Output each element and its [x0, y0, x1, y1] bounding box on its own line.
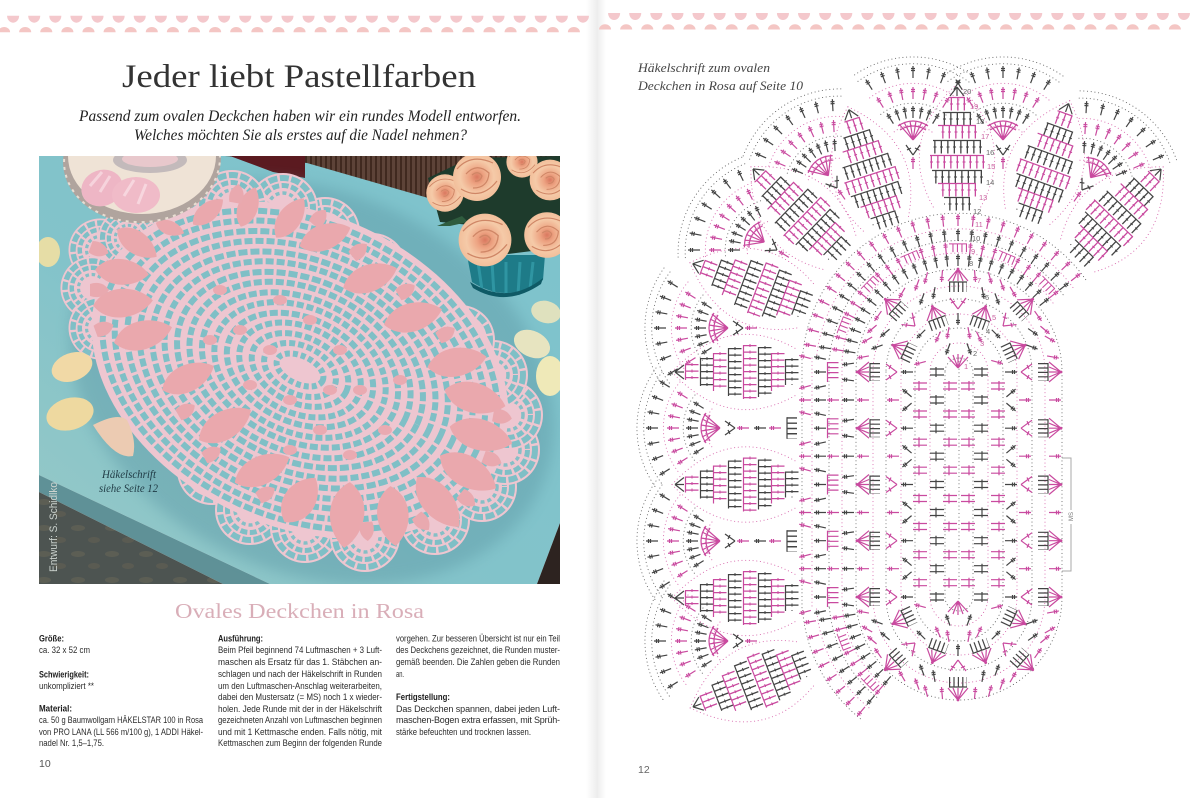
text column 2: instructions: und mit 1 Kettmasche enden. Falls nötig, mit — [218, 727, 382, 737]
text column 1: size, difficulty, material — [39, 634, 203, 748]
photo caption: Häkelschrift — [101, 469, 157, 481]
round numbers: 5 — [992, 313, 996, 322]
doily centre mesh — [92, 202, 508, 538]
top cap of rounds — [857, 268, 1059, 368]
dotted outer rounds bottom left — [803, 607, 886, 720]
round numbers: 12 — [973, 207, 981, 216]
photo: crocheted oval doily on teal table — [39, 156, 560, 584]
table top — [39, 156, 560, 584]
photo credit: Entwurf: S. Schidlko — [48, 482, 60, 572]
plate with meringues — [63, 156, 221, 224]
text column 3: finishing: Das Deckchen spannen, dabei jeden Luft- — [396, 704, 560, 714]
round numbers: 20 — [963, 87, 971, 96]
roses in teal vase — [426, 156, 560, 298]
text column 2: instructions: holen. Jede Runde mit der in der Häkelschrift — [218, 704, 382, 714]
text column 2: instructions: Beim Pfeil beginnend 74 Luftmaschen + 3 Luft- — [218, 645, 382, 655]
page number 10: 10 — [39, 758, 51, 770]
text column 1: size, difficulty, material: Größe: — [39, 634, 64, 644]
text column 3: finishing: stärke befeuchten und trocknen lassen. — [396, 727, 531, 737]
subtitle — [78, 108, 521, 144]
round numbers: 17 — [981, 132, 989, 141]
text column 1: size, difficulty, material: nadel Nr. 1,5–1,75. — [39, 738, 104, 748]
photo caption — [99, 470, 158, 492]
round numbers: 15 — [987, 162, 995, 171]
photo background wood wall — [225, 156, 559, 198]
doily scallops — [60, 170, 543, 572]
MS bracket — [1062, 458, 1075, 571]
round numbers: 4 — [986, 327, 990, 336]
subtitle: Welches möchten Sie als erstes auf die Nadel nehmen? — [134, 127, 467, 144]
chart caption: Deckchen in Rosa auf Seite 10 — [637, 78, 804, 93]
text column 1: size, difficulty, material: Schwierigkeit: — [39, 670, 89, 680]
dotted stadium rounds — [802, 269, 1062, 700]
leaf motifs — [672, 84, 1190, 743]
text column 3: finishing: Fertigstellung: — [396, 692, 450, 702]
round numbers: 1 — [964, 362, 968, 371]
title: Jeder liebt Pastellfarben — [122, 59, 476, 95]
fan blocks — [637, 57, 1187, 701]
doily centre small motifs — [203, 285, 407, 460]
dotted outer rounds top — [803, 213, 1086, 360]
red cloth — [230, 156, 305, 178]
round numbers: 7 — [977, 276, 981, 285]
round numbers: 13 — [979, 193, 987, 202]
text column 1: size, difficulty, material: unkompliziert ** — [39, 681, 94, 691]
round numbers: 6 — [985, 293, 989, 302]
round numbers: 8 — [969, 259, 973, 268]
photo caption: siehe Seite 12 — [99, 483, 158, 495]
text column 3: finishing: vorgehen. Zur besseren Übersicht ist nur ein Teil — [396, 634, 560, 644]
decorative dot border: left page — [0, 16, 589, 32]
text column 2: instructions: schlagen und nach der Häkelschrift in Runden — [218, 669, 382, 679]
round numbers: 11 — [975, 220, 983, 229]
pattern heading: Ovales Deckchen in Rosa — [175, 599, 425, 623]
doily solid leaf motifs — [92, 184, 516, 549]
chart caption — [637, 60, 804, 93]
round numbers: 2 — [973, 349, 977, 358]
round numbers — [963, 87, 996, 371]
rug below table — [39, 492, 223, 584]
rose petals on table — [36, 237, 564, 456]
crochet chart — [637, 57, 1190, 743]
chart caption: Häkelschrift zum ovalen — [637, 60, 770, 75]
text column 3: finishing: maschen-Bogen extra erfassen, mit Sprüh- — [396, 715, 560, 725]
text column 2: instructions — [218, 634, 382, 748]
text column 2: instructions: Kettmaschen zum Beginn der folgenden Runde — [218, 738, 382, 748]
doily shadow — [68, 174, 556, 584]
text column 2: instructions: gezeichneten Anzahl von Luftmaschen beginnen — [218, 715, 382, 725]
bottom cap of rounds — [857, 601, 1059, 701]
round numbers: 9 — [971, 247, 975, 256]
inner rays beside fan blocks — [754, 417, 792, 552]
text column 1: size, difficulty, material: Material: — [39, 704, 72, 714]
text column 1: size, difficulty, material: von PRO LANA (LL 566 m/100 g), 1 ADDI Häkel- — [39, 727, 203, 737]
text column 2: instructions: Ausführung: — [218, 634, 263, 644]
round numbers: 18 — [976, 117, 984, 126]
round numbers: 10 — [972, 234, 980, 243]
lower left ring sectors — [801, 603, 897, 718]
text column 3: finishing: des Deckchens gezeichnet, die Runden muster- — [396, 645, 560, 655]
text column 3: finishing — [396, 634, 560, 737]
page number 12: 12 — [638, 764, 650, 776]
text column 1: size, difficulty, material: ca. 50 g Baumwollgarn HÄKELSTAR 100 in Rosa — [39, 715, 203, 725]
central column rows — [799, 354, 1062, 615]
text column 2: instructions: maschen als Ersatz für das 1. Stäbchen an- — [218, 657, 382, 667]
doily small fans — [88, 183, 513, 542]
gutter shadow left page — [586, 0, 598, 798]
text column 2: instructions: um den Luftmaschen-Anschlag weiterarbeiten, — [218, 681, 382, 691]
text column 1: size, difficulty, material: ca. 32 x 52 cm — [39, 645, 90, 655]
subtitle: Passend zum ovalen Deckchen haben wir ein rundes Modell entworfen. — [78, 108, 521, 125]
round numbers: 16 — [986, 148, 994, 157]
text column 3: finishing: gemäß beenden. Die Zahlen geben die Runden — [396, 657, 560, 667]
decorative dot border: right page — [599, 13, 1190, 30]
round numbers: 14 — [986, 178, 994, 187]
MS bracket: MS — [1069, 512, 1075, 521]
table side — [39, 475, 270, 584]
text column 3: finishing: an. — [396, 669, 404, 679]
dark floor corner — [537, 523, 560, 584]
text column 2: instructions: dabei den Mustersatz (= MS) noch 1 x wieder- — [218, 692, 382, 702]
round numbers: 19 — [970, 102, 978, 111]
round numbers: 3 — [980, 339, 984, 348]
gutter shadow right page — [598, 0, 606, 798]
upper ring sectors — [801, 213, 1082, 364]
